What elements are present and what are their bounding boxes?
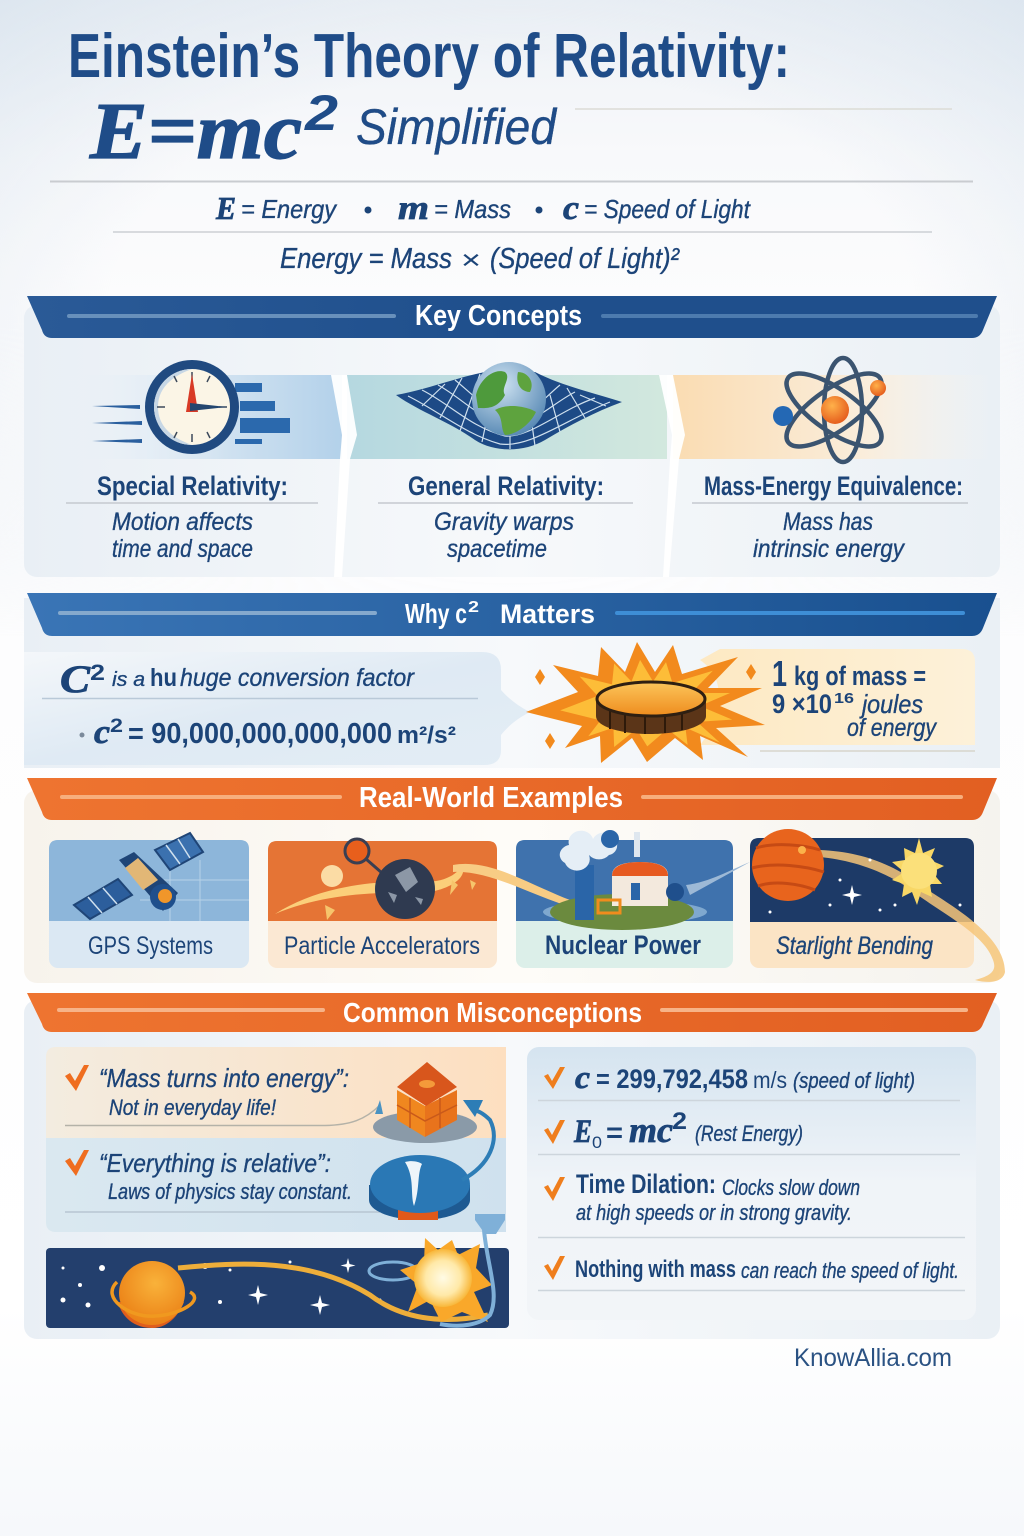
fact: rest energy: mc <box>629 1110 673 1150</box>
ribbon: why c2 matters: Matters <box>500 599 595 629</box>
description <box>112 508 253 563</box>
callout: conversion factor: = 90,000,000,000,000 <box>128 718 392 750</box>
fact: rest energy: (Rest Energy) <box>695 1121 803 1146</box>
heading: General Relativity: <box>408 471 604 501</box>
icon: satellite <box>74 833 203 919</box>
formula legend: = Speed of Light <box>584 194 752 224</box>
icon: clock with speed lines <box>92 360 290 454</box>
icon: sun with ring <box>369 1238 492 1322</box>
misconception: relative <box>65 1148 380 1212</box>
fact: mass limit: Nothing with mass <box>575 1256 736 1283</box>
card: general relativity <box>347 362 667 563</box>
cosmic band <box>46 1214 509 1328</box>
panel: why c2 matters <box>24 598 1000 768</box>
misconception: mass <box>65 1063 380 1126</box>
title: Einstein’s Theory of Relativity: <box>68 22 790 91</box>
title <box>68 22 952 176</box>
description: spacetime <box>447 535 547 563</box>
misconception: mass: “Mass turns into energy”: <box>99 1063 349 1093</box>
title: 2 <box>304 85 338 141</box>
word equation: Energy = Mass <box>280 243 452 275</box>
energy info box: 16 <box>834 690 854 707</box>
formula legend: = Mass <box>434 194 511 224</box>
icon: ringed planet <box>112 1261 195 1328</box>
callout: conversion factor: is a <box>112 669 145 691</box>
fact: speed of light <box>538 1059 960 1100</box>
ribbon: why c2 matters <box>27 593 997 636</box>
description: Mass has <box>783 508 873 536</box>
formula legend: E <box>215 190 236 226</box>
formula legend: c <box>563 190 579 227</box>
facts card <box>527 1047 976 1320</box>
fact: time dilation: Time Dilation: <box>576 1169 716 1199</box>
panel: key concepts <box>24 305 1000 577</box>
description: Gravity warps <box>434 508 574 536</box>
connector tube <box>440 1214 505 1326</box>
footer credit: KnowAllia.com <box>794 1344 952 1372</box>
fact: speed of light: (speed of light) <box>793 1068 915 1093</box>
panel: common misconceptions <box>24 1000 1000 1339</box>
icon: planet star and bent light <box>752 829 1005 982</box>
fact: time dilation: Clocks slow down <box>722 1175 860 1200</box>
ribbon: real-world examples: Real-World Examples <box>359 782 623 814</box>
fact: speed of light: = 299,792,458 <box>596 1064 748 1094</box>
icon: power plant <box>550 830 694 930</box>
title: Simplified <box>356 99 558 155</box>
fact: time dilation: at high speeds or in strong gravity. <box>576 1200 852 1225</box>
icon: exploding disc <box>526 642 765 763</box>
icon: blue disc with arrow <box>369 1100 494 1220</box>
fact: rest energy <box>538 1108 960 1154</box>
callout: conversion factor: c <box>94 714 110 751</box>
energy info box: 1 <box>772 653 787 694</box>
formula legend: = Energy <box>241 194 338 224</box>
formula legend <box>215 190 752 227</box>
energy info box <box>700 649 975 751</box>
ribbon: why c2 matters: Why c <box>405 598 467 629</box>
callout: conversion factor <box>24 652 530 765</box>
energy info box: joules <box>859 689 923 719</box>
description: time and space <box>112 535 253 563</box>
example: gps systems: GPS Systems <box>88 932 213 960</box>
icon: atom <box>773 358 892 462</box>
ribbon: key concepts: Key Concepts <box>415 300 582 332</box>
misconception: mass: Not in everyday life! <box>109 1095 276 1120</box>
fact: speed of light: m/s <box>753 1067 787 1093</box>
fact: rest energy: 0 <box>592 1133 602 1152</box>
callout: conversion factor: 2 <box>90 660 105 685</box>
misconception: relative: “Everything is relative”: <box>99 1148 331 1178</box>
description <box>434 508 574 563</box>
fact: rest energy: E <box>573 1114 592 1150</box>
formula legend: m <box>398 190 429 227</box>
panel: real-world examples <box>24 790 1005 983</box>
fact: rest energy: = <box>606 1117 623 1148</box>
energy info box: kg of mass = <box>794 661 926 691</box>
example: starlight bending: Starlight Bending <box>776 932 933 960</box>
description: Motion affects <box>112 508 253 536</box>
ribbon: common misconceptions: Common Misconceptions <box>343 997 642 1028</box>
callout: conversion factor: huge conversion factor <box>180 664 416 692</box>
word equation: (Speed of Light)² <box>490 243 680 275</box>
icon: colliding spheres <box>321 839 476 920</box>
energy info box: of energy <box>847 714 937 742</box>
icon: earth on warped spacetime <box>396 362 622 449</box>
misconceptions card <box>46 1047 506 1232</box>
misconception: relative: Laws of physics stay constant. <box>108 1179 352 1204</box>
example: starlight bending <box>750 829 1005 982</box>
description <box>753 508 905 563</box>
callout: conversion factor: m²/s² <box>397 722 456 749</box>
example: nuclear power: Nuclear Power <box>545 930 701 960</box>
callout: conversion factor: C <box>60 658 91 701</box>
word equation <box>280 243 680 275</box>
icon: sparkle diamonds <box>535 664 756 749</box>
title: E=mc <box>89 88 302 176</box>
ribbon: common misconceptions <box>27 993 997 1032</box>
callout: conversion factor: hu <box>150 664 177 692</box>
example: nuclear power <box>453 830 750 968</box>
example: gps systems <box>49 833 249 968</box>
example: particle accelerators: Particle Accelerators <box>284 932 480 960</box>
light path <box>178 1264 488 1319</box>
fact: time dilation <box>538 1169 965 1238</box>
ribbon: key concepts <box>27 296 997 338</box>
description: intrinsic energy <box>753 535 905 563</box>
energy info box: 9 ×10 <box>772 689 832 719</box>
fact: mass limit: can reach the speed of light. <box>741 1258 959 1283</box>
ribbon: why c2 matters: 2 <box>468 599 479 616</box>
card: special relativity <box>60 360 342 563</box>
fact: mass limit <box>538 1256 965 1290</box>
icon: orange box on platform <box>373 1062 477 1143</box>
example: particle accelerators <box>268 839 497 968</box>
heading: Special Relativity: <box>97 471 288 501</box>
fact: rest energy: 2 <box>672 1108 687 1135</box>
callout: conversion factor: 2 <box>110 716 123 737</box>
ribbon: real-world examples <box>27 778 997 820</box>
word equation: × <box>461 245 481 275</box>
fact: speed of light: c <box>575 1059 590 1095</box>
card: mass-energy equivalence <box>673 358 991 563</box>
